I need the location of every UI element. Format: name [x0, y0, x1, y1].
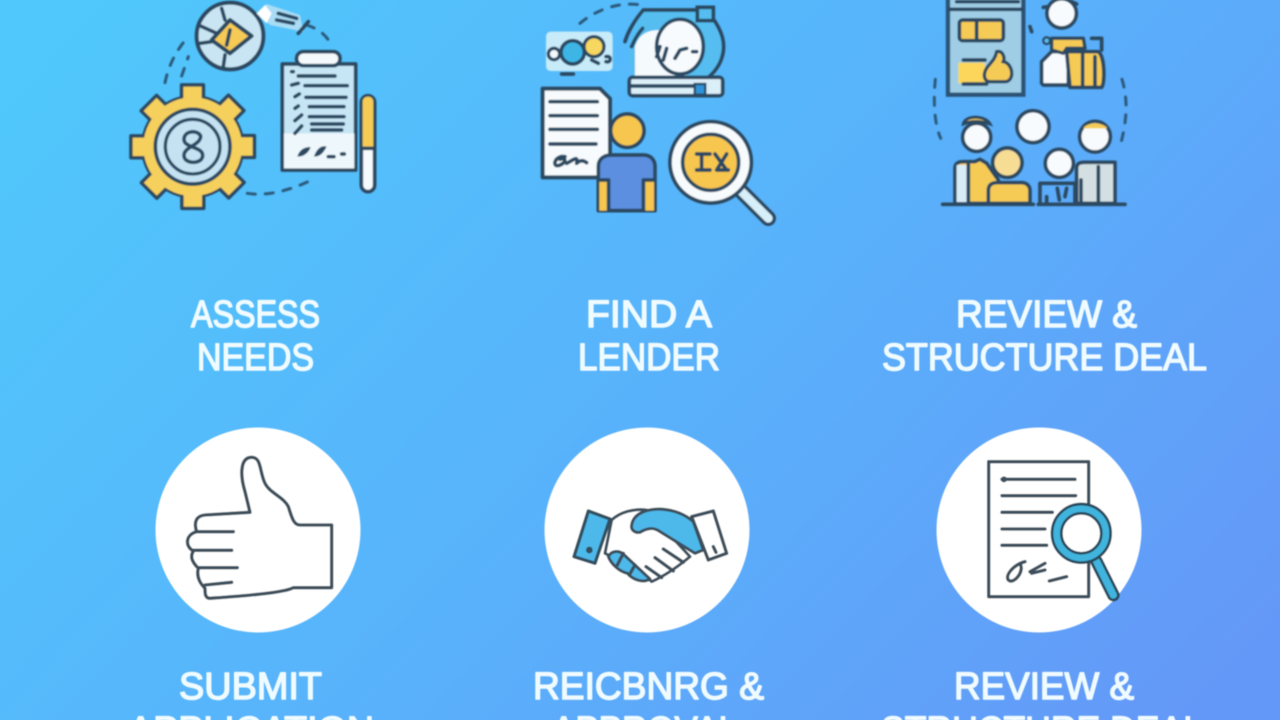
icon: review and structure deal (team, planner)	[934, 0, 1126, 204]
step label: find a lender: FIND A	[586, 294, 713, 336]
circle icon: document review	[936, 428, 1142, 632]
planner with thumb	[948, 0, 1023, 95]
step label: review and structure deal (repeat): REVIEW &	[954, 666, 1134, 708]
globe / head on stand	[625, 7, 724, 96]
person	[598, 114, 655, 211]
step label: find a lender: LENDER	[578, 337, 720, 379]
magnifier	[670, 122, 768, 218]
step label: review and structure deal	[882, 294, 1207, 379]
pen	[361, 96, 375, 192]
step label: review and structure deal: STRUCTURE DEAL	[882, 337, 1207, 379]
top person	[1042, 0, 1104, 87]
circle icon: handshake	[544, 428, 750, 632]
connected people badge	[546, 32, 613, 74]
step label: review and structure deal: REVIEW &	[956, 294, 1137, 336]
gear with dollar	[131, 85, 254, 208]
clipboard	[282, 52, 356, 170]
dashed orbit path	[580, 4, 638, 23]
step label: assess needs	[191, 294, 320, 379]
dashed orbit path	[165, 25, 330, 194]
step label: submit application	[128, 666, 374, 720]
step label: assess needs: ASSESS	[191, 294, 320, 336]
circle icon: thumbs up	[156, 428, 360, 632]
icon: assess needs (gear, chart, clipboard)	[131, 3, 375, 208]
step label: lending and approval: REICBNRG &	[533, 666, 764, 708]
step label: assess needs: NEEDS	[197, 337, 314, 379]
icon: find a lender (person, document, magnifier)	[543, 4, 768, 218]
step label: find a lender	[578, 294, 720, 379]
team group	[943, 111, 1125, 204]
step label: review and structure deal (repeat)	[881, 666, 1203, 720]
chart circle	[197, 3, 308, 69]
signed document	[543, 89, 610, 177]
dashed orbit path	[934, 27, 1126, 142]
step label: submit application: SUBMIT	[179, 666, 322, 708]
